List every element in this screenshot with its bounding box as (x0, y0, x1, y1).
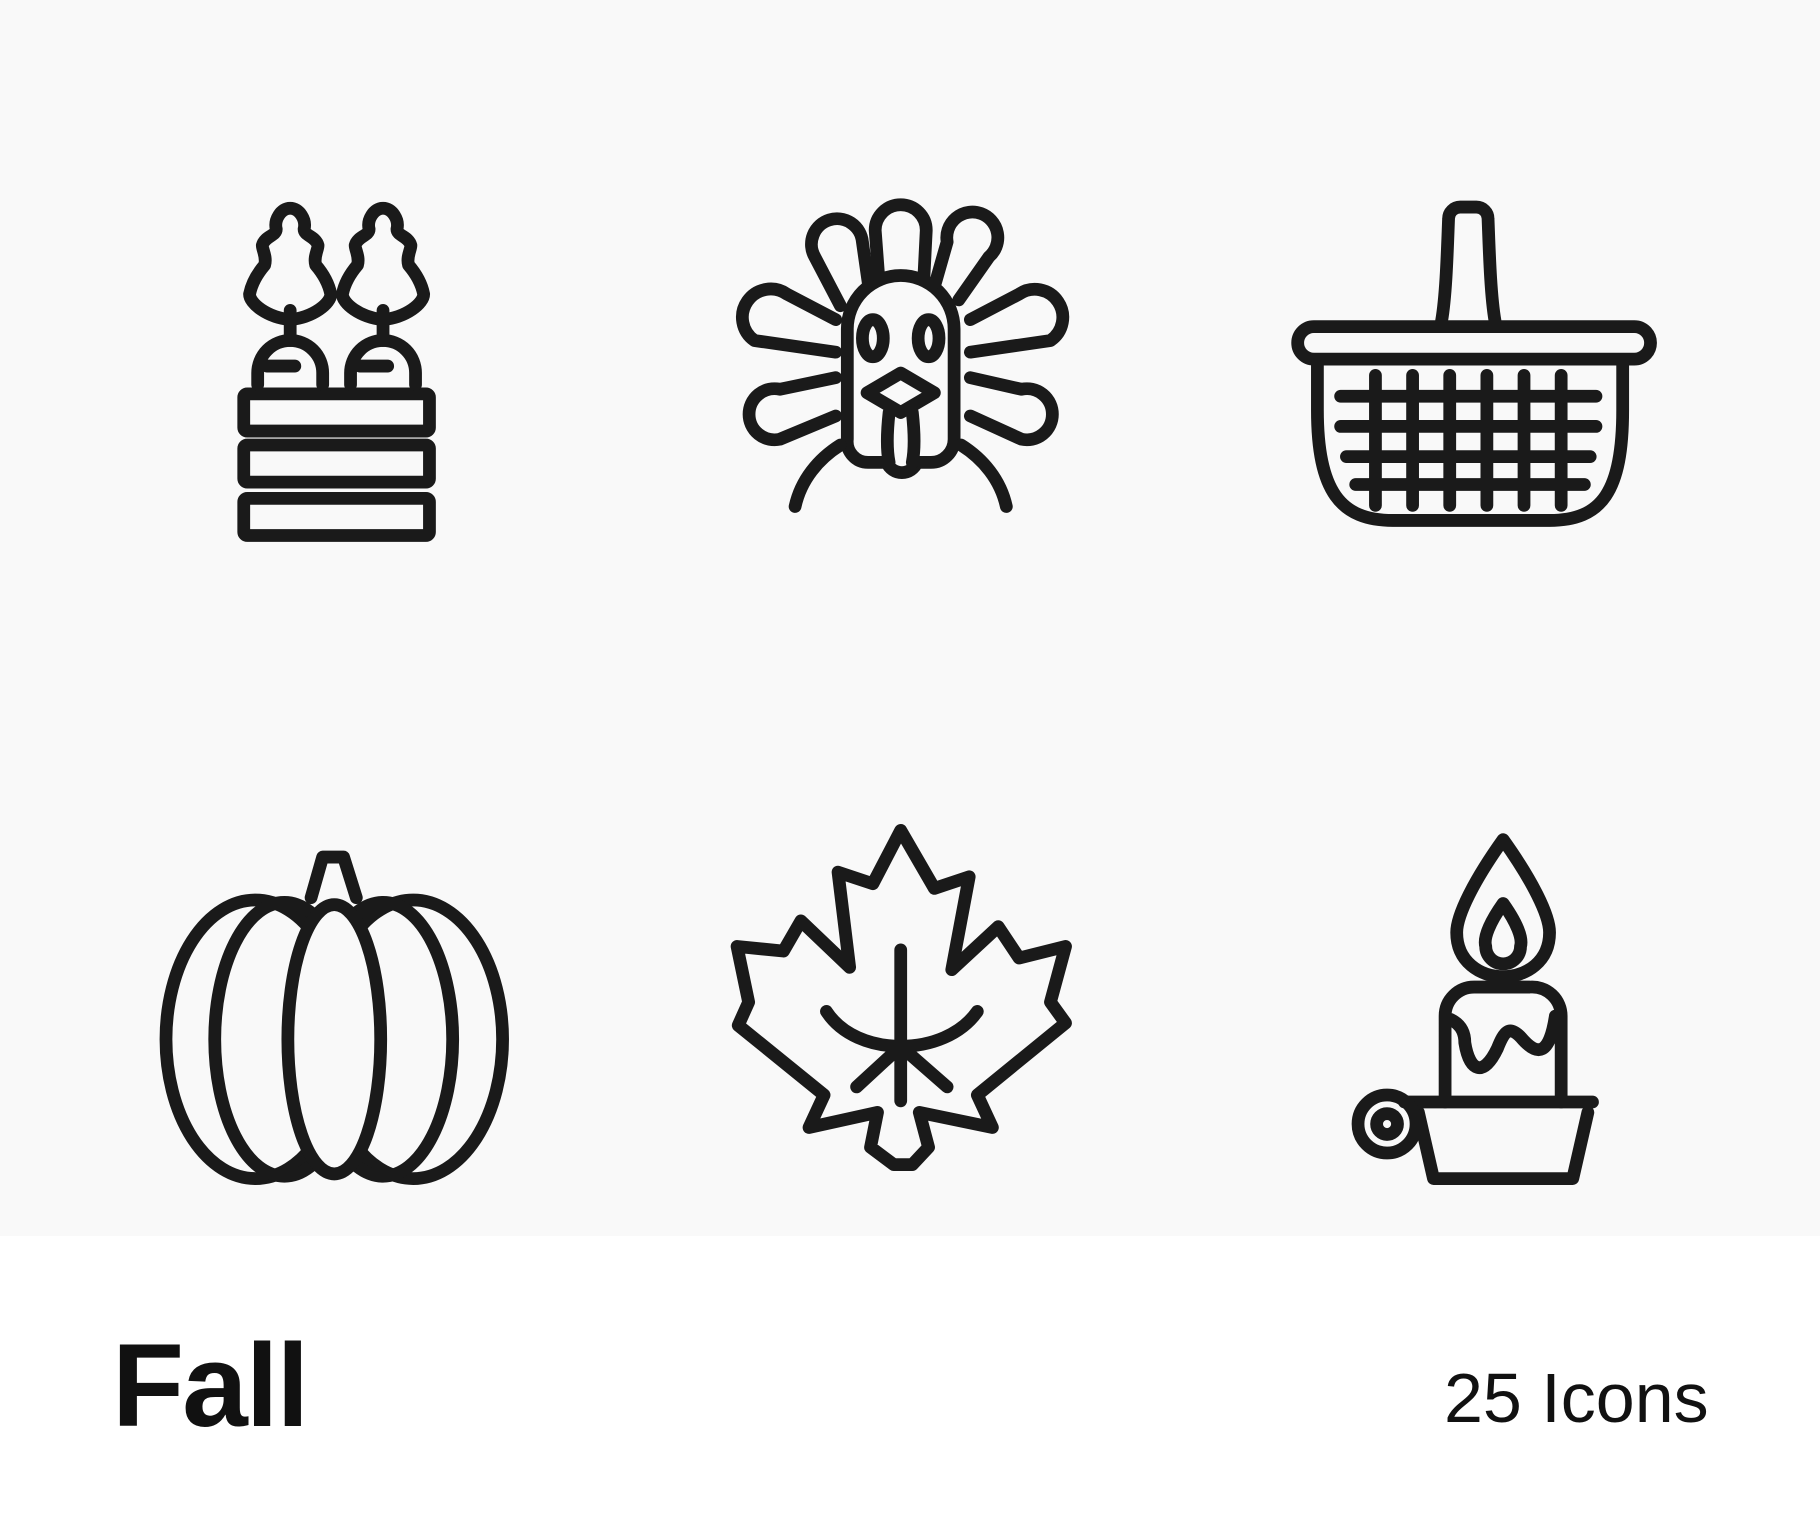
icon: carrot crate (244, 208, 429, 536)
icon: turkey (742, 205, 1063, 507)
icon: candle (1358, 840, 1592, 1179)
title: Fall (112, 1320, 307, 1452)
icon: pumpkin (166, 857, 503, 1179)
icon count: 25 Icons (1444, 1359, 1709, 1437)
icon: maple leaf (737, 830, 1066, 1165)
icon: basket (1298, 207, 1651, 520)
